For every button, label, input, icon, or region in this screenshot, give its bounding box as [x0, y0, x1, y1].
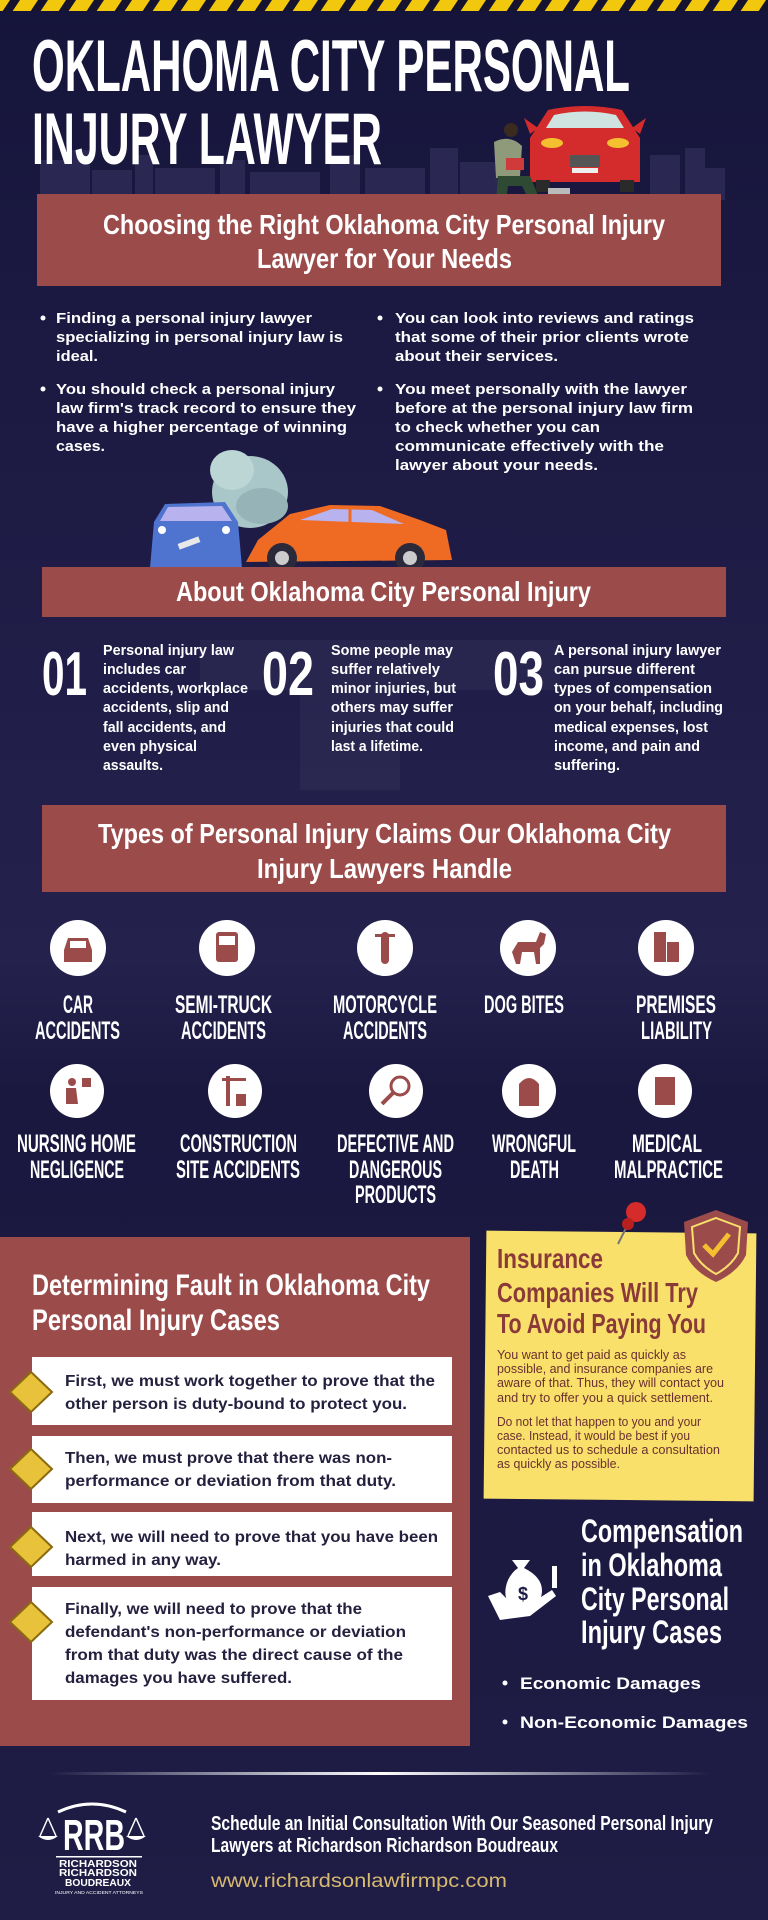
- footer logo: RRB: [63, 1811, 125, 1860]
- point 02: 02: [262, 640, 314, 709]
- step 1: [10, 1357, 452, 1425]
- claim: nursing home negligence: NURSING HOME: [17, 1130, 136, 1158]
- claim: medical malpractice: MEDICAL: [632, 1130, 702, 1158]
- step 2: performance or deviation from that duty.: [65, 1473, 396, 1490]
- claim: defective and dangerous products: [337, 1064, 454, 1209]
- sticky note: insurance companies: You want to get paid as quickly as: [497, 1348, 686, 1362]
- banner: types of claims: [42, 805, 726, 892]
- sticky note: insurance companies: Insurance: [497, 1243, 603, 1274]
- step 4: from that duty was the direct cause of the: [65, 1647, 403, 1664]
- bullets: right column: You can look into reviews and ratings: [395, 310, 694, 327]
- banner: choosing the right lawyer: Lawyer for Your Needs: [257, 243, 512, 274]
- sticky note: insurance companies: aware of that. Thus, they will contact you: [497, 1376, 724, 1390]
- step 4: damages you have suffered.: [65, 1670, 292, 1687]
- footer logo: INJURY AND ACCIDENT ATTORNEYS: [55, 1890, 143, 1895]
- bullets: left column: [40, 310, 357, 455]
- sticky note: insurance companies: To Avoid Paying You: [497, 1308, 706, 1339]
- point 01: fall accidents, and: [103, 719, 226, 736]
- bullets: left column: ideal.: [56, 348, 98, 365]
- claim: construction site accidents: CONSTRUCTION: [180, 1130, 297, 1158]
- illustration: car crash: [150, 450, 452, 573]
- compensation bullets: Non-Economic Damages: [520, 1713, 748, 1732]
- sticky note: insurance companies: and try to offer you a quick settlement.: [497, 1391, 713, 1405]
- bullets: right column: to check whether you can: [395, 419, 600, 436]
- step 4: defendant's non-performance or deviation: [65, 1624, 406, 1641]
- claim: semi-truck accidents: ACCIDENTS: [181, 1017, 266, 1045]
- claim: semi-truck accidents: SEMI-TRUCK: [175, 991, 272, 1019]
- footer tagline: [211, 1813, 714, 1857]
- claim: defective and dangerous products: DEFECTIVE AND: [337, 1130, 454, 1158]
- bullets: right column: that some of their prior clients wrote: [395, 329, 689, 346]
- step 1: other person is duty-bound to protect you.: [65, 1396, 407, 1413]
- point 02: others may suffer: [331, 699, 453, 716]
- bullets: right column: lawyer about your needs.: [395, 457, 598, 474]
- claim: premises liability: PREMISES: [636, 991, 716, 1019]
- banner: types of claims: Types of Personal Injury Claims Our Oklahoma City: [98, 818, 671, 849]
- claim: wrongful death: DEATH: [510, 1156, 559, 1184]
- footer logo: [38, 1804, 146, 1895]
- point 03: [493, 640, 723, 774]
- heading: compensation: in Oklahoma: [581, 1547, 722, 1583]
- heading: determining fault: [32, 1269, 430, 1337]
- hazard stripe: [0, 0, 768, 11]
- point 01: accidents, slip and: [103, 699, 229, 716]
- step 3: Next, we will need to prove that you have been: [65, 1529, 438, 1546]
- step 2: Then, we must prove that there was non-: [65, 1450, 392, 1467]
- point 01: [42, 640, 248, 774]
- point 03: on your behalf, including: [554, 699, 723, 716]
- claim: car accidents: ACCIDENTS: [35, 1017, 120, 1045]
- point 01: assaults.: [103, 757, 163, 774]
- point 02: suffer relatively: [331, 661, 441, 678]
- heading: compensation: Injury Cases: [581, 1614, 722, 1650]
- footer tagline: Lawyers at Richardson Richardson Boudreaux: [211, 1835, 558, 1857]
- bullets: right column: before at the personal injury law firm: [395, 400, 693, 417]
- claim: wrongful death: [492, 1064, 576, 1184]
- point 03: can pursue different: [554, 661, 695, 678]
- claim: premises liability: LIABILITY: [641, 1017, 712, 1045]
- bullets: left column: law firm's track record to ensure they: [56, 400, 357, 417]
- bullets: right column: [378, 310, 694, 474]
- claim: motorcycle accidents: [333, 920, 437, 1045]
- point 03: 03: [493, 640, 544, 709]
- claim: semi-truck accidents: [175, 920, 272, 1045]
- bullets: left column: specializing in personal injury law is: [56, 329, 343, 346]
- icon: hand with money bag: [488, 1560, 557, 1620]
- bullets: right column: You meet personally with the lawyer: [395, 381, 687, 398]
- point 03: suffering.: [554, 757, 620, 774]
- point 03: income, and pain and: [554, 738, 700, 755]
- point 02: Some people may: [331, 642, 454, 659]
- point 02: minor injuries, but: [331, 680, 456, 697]
- footer logo: RICHARDSON: [59, 1859, 137, 1870]
- title: [32, 26, 630, 180]
- step 4: Finally, we will need to prove that the: [65, 1601, 362, 1618]
- icon: pushpin: [618, 1202, 646, 1244]
- step 3: [10, 1512, 452, 1576]
- bullets: left column: have a higher percentage of winning: [56, 419, 347, 436]
- claim: car accidents: [35, 920, 120, 1045]
- faint background oklahoma shape: [200, 640, 560, 790]
- banner: choosing the right lawyer: Choosing the Right Oklahoma City Personal Injury: [103, 209, 665, 240]
- point 03: A personal injury lawyer: [554, 642, 721, 659]
- point 03: types of compensation: [554, 680, 712, 697]
- claim: defective and dangerous products: PRODUCTS: [355, 1181, 436, 1209]
- point 02: [262, 640, 456, 755]
- step 3: harmed in any way.: [65, 1552, 221, 1569]
- bullets: left column: cases.: [56, 438, 105, 455]
- banner: choosing the right lawyer: [37, 194, 721, 286]
- sticky note: insurance companies: Companies Will Try: [497, 1277, 698, 1308]
- banner: types of claims: Injury Lawyers Handle: [257, 853, 512, 884]
- heading: determining fault: Personal Injury Cases: [32, 1304, 280, 1337]
- point 01: Personal injury law: [103, 642, 234, 659]
- point 01: even physical: [103, 738, 197, 755]
- point 01: includes car: [103, 661, 186, 678]
- sticky note: insurance companies: contacted us to schedule a consultation: [497, 1443, 720, 1457]
- claim: dog bites: [484, 920, 564, 1019]
- bullets: right column: about their services.: [395, 348, 558, 365]
- sticky note: insurance companies: as quickly as possible.: [497, 1457, 620, 1471]
- step 4: [10, 1587, 452, 1700]
- claim: construction site accidents: SITE ACCIDENTS: [176, 1156, 300, 1184]
- claim: dog bites: DOG BITES: [484, 991, 564, 1019]
- claim: medical malpractice: [614, 1064, 723, 1184]
- claim: motorcycle accidents: ACCIDENTS: [343, 1017, 427, 1045]
- sticky note: insurance companies: Do not let that happen to you and your: [497, 1415, 701, 1429]
- claim: premises liability: [636, 920, 716, 1045]
- footer url: www.richardsonlawfirmpc.com: [210, 1871, 507, 1892]
- icon: shield: [684, 1210, 748, 1282]
- claim: wrongful death: WRONGFUL: [492, 1130, 576, 1158]
- bullets: right column: communicate effectively with the: [395, 438, 664, 455]
- skyline silhouette: [40, 148, 725, 200]
- claim: nursing home negligence: [17, 1064, 136, 1184]
- claim: construction site accidents: [176, 1064, 300, 1184]
- sticky note: insurance companies: case. Instead, it would be best if you: [497, 1429, 690, 1443]
- point 02: last a lifetime.: [331, 738, 423, 755]
- claim: car accidents: CAR: [63, 991, 93, 1019]
- claim: nursing home negligence: NEGLIGENCE: [30, 1156, 124, 1184]
- step 1: First, we must work together to prove that the: [65, 1373, 435, 1390]
- step 2: [10, 1436, 452, 1503]
- bullets: left column: You should check a personal injury: [56, 381, 336, 398]
- point 02: injuries that could: [331, 719, 454, 736]
- sticky note: insurance companies: [484, 1202, 756, 1501]
- banner: about: About Oklahoma City Personal Injury: [176, 576, 591, 607]
- compensation bullets: Economic Damages: [520, 1674, 701, 1693]
- compensation bullets: [502, 1674, 748, 1732]
- illustration: man inspecting red car: [494, 106, 646, 202]
- icon: hand with money bag: $: [518, 1584, 528, 1604]
- footer logo: BOUDREAUX: [65, 1878, 131, 1889]
- banner: about: [42, 567, 726, 617]
- sticky note: insurance companies: possible, and insurance companies are: [497, 1362, 713, 1376]
- claim: motorcycle accidents: MOTORCYCLE: [333, 991, 437, 1019]
- panel: determining fault: [0, 1237, 470, 1746]
- point 01: accidents, workplace: [103, 680, 248, 697]
- point 03: medical expenses, lost: [554, 719, 708, 736]
- point 01: 01: [42, 640, 87, 709]
- heading: determining fault: Determining Fault in Oklahoma City: [32, 1269, 430, 1302]
- bullets: left column: Finding a personal injury lawyer: [56, 310, 312, 327]
- footer logo: RICHARDSON: [59, 1868, 137, 1879]
- title: INJURY LAWYER: [32, 99, 382, 180]
- heading: compensation: [581, 1513, 743, 1650]
- claim: defective and dangerous products: DANGEROUS: [349, 1156, 442, 1184]
